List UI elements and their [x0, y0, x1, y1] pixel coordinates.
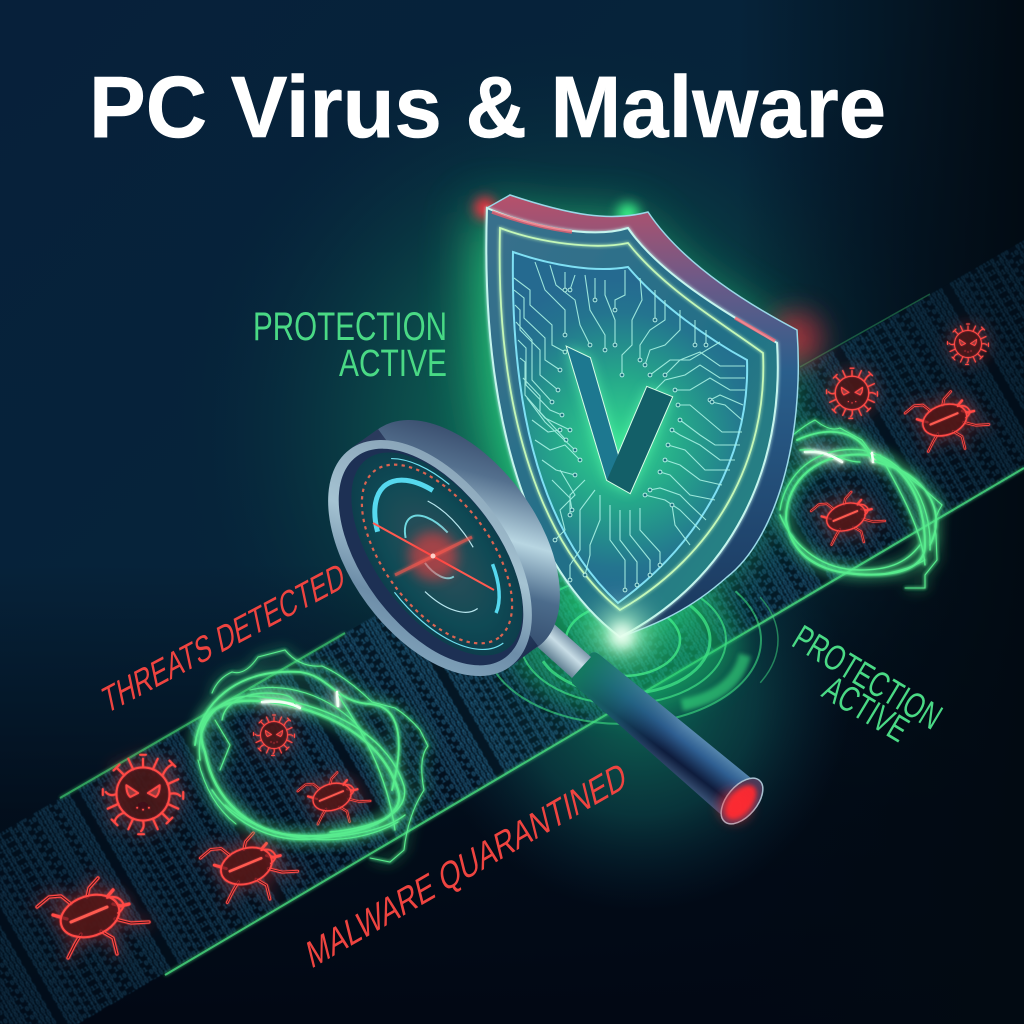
label: protection active, lower right: ACTIVE — [816, 667, 916, 750]
energy swirl, lower left — [195, 650, 428, 862]
magnifier lens — [302, 416, 560, 698]
ground crescent glow — [682, 655, 745, 705]
shield front rim — [486, 208, 778, 637]
icon: bug 5 — [811, 492, 885, 545]
threat icons, lower left — [37, 715, 370, 958]
magnifier handle — [533, 623, 771, 831]
V emblem — [567, 347, 672, 493]
shield tip glow — [598, 608, 646, 656]
circuit traces — [514, 262, 745, 590]
red rim highlights — [492, 212, 775, 341]
shield side wall — [487, 195, 798, 637]
icon: virus 1 — [103, 755, 183, 834]
icon: bug 3 — [298, 772, 370, 824]
magnifier front ring — [287, 403, 573, 713]
icon: bug 1 — [37, 878, 149, 958]
ground center flash — [610, 624, 634, 648]
title: PC Virus & Malware — [89, 59, 886, 156]
icon: bug 4 — [905, 392, 989, 452]
data stream band — [0, 240, 1024, 1024]
threat icons, upper right — [811, 324, 989, 545]
label: malware quarantined: MALWARE QUARANTINED — [303, 753, 630, 977]
ground target rings — [468, 548, 778, 732]
icon: virus 4 — [948, 324, 988, 364]
energy swirl, right — [780, 420, 942, 588]
shield — [474, 195, 822, 656]
shield inner line — [500, 228, 763, 610]
icon: bug 2 — [200, 833, 298, 903]
icon: virus 2 — [254, 715, 294, 756]
magnifier barrel — [315, 383, 601, 693]
shield glow — [474, 197, 822, 650]
icon: virus 3 — [827, 368, 877, 418]
label: threats detected: THREATS DETECTED — [99, 554, 348, 722]
label: protection active, lower right: PROTECTION — [786, 617, 949, 737]
label: protection active, upper: PROTECTION — [253, 305, 447, 349]
shield circuit panel — [513, 252, 747, 603]
label: protection active, upper — [253, 305, 447, 385]
label: protection active, lower right — [771, 617, 949, 761]
label: protection active, upper: ACTIVE — [339, 343, 447, 385]
magnifying glass — [287, 383, 771, 831]
